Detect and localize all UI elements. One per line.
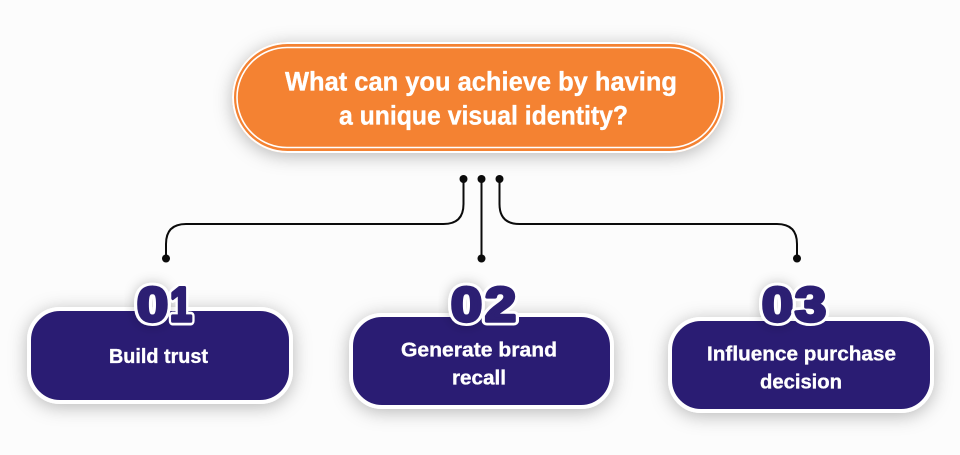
number 02: 0 [451,279,482,332]
number 01: 1 [170,279,192,332]
number 02: 2 [485,279,516,332]
card label [707,344,896,394]
card background [29,309,291,402]
number 03: 3 [795,279,826,332]
card background [670,319,932,411]
connector: centre branch to card 02 [478,175,486,262]
panel: card 03 influence purchase decision [670,279,932,411]
panel: card 02 generate brand recall [351,279,612,407]
panel: card 01 build trust [29,279,291,402]
heading: question text: What can you achieve by having [285,66,677,96]
panel: central question pill [232,42,725,153]
number 01: 0 [137,279,168,332]
number 01: 1 [170,279,192,332]
card label [401,340,557,390]
number 02: 2 [485,279,516,332]
connector: left branch to card 01 [162,175,468,262]
pill shape with double white outline [232,42,725,153]
card background [351,315,612,407]
number 03 [762,279,826,332]
heading: question text: a unique visual identity? [339,100,628,130]
number 03: 0 [762,279,793,332]
connector: right branch to card 03 [496,175,801,262]
number 01 [137,279,192,332]
card label: Generate brand [401,340,557,362]
number 02 [451,279,516,332]
card label: decision [760,372,842,394]
number 02: 0 [451,279,482,332]
card label: Influence purchase [707,344,896,366]
card label: Build trust [109,346,208,368]
card label: recall [452,368,506,390]
heading: question text [285,66,677,130]
number 01: 0 [137,279,168,332]
number 03: 3 [795,279,826,332]
number 03: 0 [762,279,793,332]
